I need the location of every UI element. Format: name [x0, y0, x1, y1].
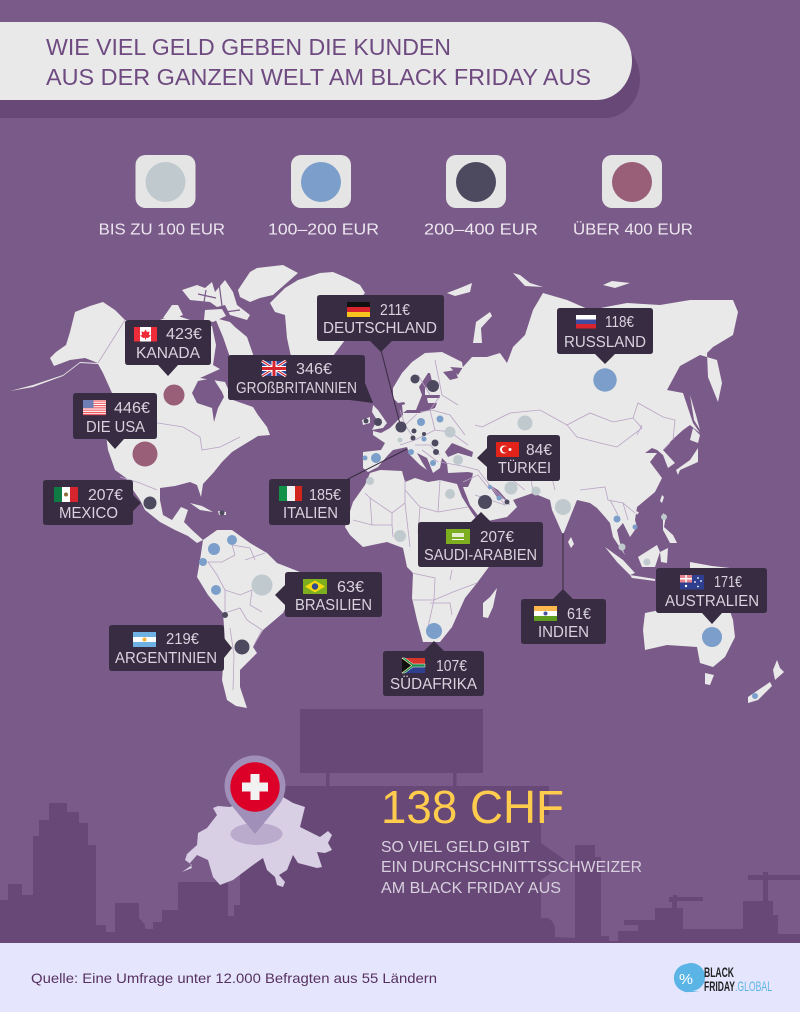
callout: Italien [269, 479, 350, 525]
Arctic islands [163, 265, 298, 363]
callout: Die USA: 446€ [114, 400, 150, 417]
callout: Australien: 171€ [714, 574, 742, 591]
Caribbean islands [190, 503, 226, 515]
callout: Südafrika [383, 641, 484, 696]
Swiss figure description: SO VIEL GELD GIBT [381, 839, 531, 856]
Southeast Asia islands [568, 495, 730, 581]
callout: Brasilien: 63€ [337, 579, 364, 596]
callout: Türkei [477, 435, 560, 481]
callout: Argentinien: 219€ [166, 631, 199, 648]
callout: Indien: INDIEN [538, 624, 589, 641]
callout: Russland [557, 308, 653, 364]
callout: Brasilien: BRASILIEN [295, 597, 372, 614]
New Zealand [748, 660, 784, 703]
callout: Die USA: DIE USA [86, 419, 145, 436]
Tasmania [705, 673, 714, 685]
Swiss figure headline: 138 CHF [381, 781, 564, 833]
callout: Argentinien [109, 625, 232, 671]
callout: Russland: RUSSLAND [564, 334, 646, 351]
callout: Türkei: 84€ [526, 442, 552, 459]
callout: Südafrika: 107€ [436, 658, 467, 675]
callout leader lines [348, 350, 563, 592]
North America [10, 302, 270, 543]
callout: Australien: AUSTRALIEN [665, 593, 759, 610]
flag: Turkey [496, 442, 519, 457]
Swiss flag badge [230, 762, 280, 812]
location pin [224, 755, 286, 834]
legend: up to 100 EUR: BIS ZU 100 EUR [99, 222, 225, 238]
callout: Südafrika: SÜDAFRIKA [390, 675, 477, 693]
pin shadow [230, 823, 282, 845]
callout: Deutschland [317, 295, 444, 352]
Baltic Sea [403, 373, 440, 413]
world map [10, 265, 784, 708]
callout: Großbritannien: GROßBRITANNIEN [236, 380, 357, 397]
callout: Großbritannien: 346€ [296, 361, 332, 378]
flag: Brazil [303, 579, 327, 594]
callout: Mexico [43, 480, 141, 525]
Madagascar [483, 588, 497, 618]
callout: Großbritannien [228, 355, 373, 403]
legend: 200 to 400 EUR: 200–400 EUR [424, 222, 538, 238]
Swiss figure description: AM BLACK FRIDAY AUS [381, 880, 561, 897]
Hudson Bay [192, 378, 224, 422]
flag: Mexico [54, 487, 78, 502]
Africa [345, 470, 510, 642]
logo: Black Friday Global: BLACK [704, 964, 734, 980]
callout: Kanada: KANADA [136, 345, 200, 362]
inland seas [192, 283, 507, 500]
callout: Indien: 61€ [567, 606, 591, 623]
legend: 200 to 400 EUR [424, 155, 538, 238]
callout: Deutschland: 211€ [380, 302, 410, 319]
Northern islands [447, 273, 630, 343]
flag: India [534, 606, 557, 621]
callout: Kanada: 423€ [166, 326, 202, 343]
callout: Australien [656, 568, 767, 624]
callout: Saudi-Arabien: 207€ [480, 529, 514, 546]
Greenland [270, 272, 365, 375]
continents [10, 265, 784, 708]
footer [0, 943, 800, 1012]
flag: United Kingdom [262, 361, 286, 376]
flag: Germany [347, 302, 370, 317]
country borders [98, 320, 675, 690]
flag: Australia [680, 575, 704, 590]
White Sea [443, 370, 458, 380]
logo: Black Friday Global [674, 963, 772, 994]
flag: Russia [576, 315, 596, 328]
flag: Saudi Arabia [446, 529, 470, 544]
South America [197, 530, 300, 708]
legend: 100 to 200 EUR [268, 155, 379, 238]
flag: Argentina [133, 632, 156, 647]
callout: Mexico: MEXICO [59, 505, 118, 522]
British Isles [362, 405, 387, 430]
Black Sea [445, 443, 473, 457]
callout: Deutschland: DEUTSCHLAND [323, 320, 437, 337]
Australia [643, 605, 735, 667]
data bubbles [132, 368, 758, 699]
callout: Mexico: 207€ [88, 487, 123, 504]
callout: Indien [521, 589, 606, 644]
legend: over 400 EUR [573, 155, 693, 238]
callout: Italien: ITALIEN [283, 505, 338, 522]
title text: AUS DER GANZEN WELT AM BLACK FRIDAY AUS [46, 64, 591, 90]
callout: Brasilien [275, 572, 382, 617]
callout: Russland: 118€ [605, 314, 634, 331]
Switzerland map with pin [182, 755, 332, 887]
callout: Italien: 185€ [309, 487, 341, 504]
logo: Black Friday Global: .GLOBAL [735, 978, 772, 994]
flag: Canada [134, 327, 157, 342]
Swiss figure description: EIN DURCHSCHNITTSSCHWEIZER [381, 859, 642, 876]
legend: over 400 EUR: ÜBER 400 EUR [573, 220, 693, 238]
logo: Black Friday Global: FRIDAY [704, 978, 735, 994]
title text: WIE VIEL GELD GEBEN DIE KUNDEN [46, 34, 451, 60]
flag: South Africa [402, 658, 425, 673]
skyline background [0, 709, 800, 943]
callout: Kanada [125, 320, 211, 376]
Arctic channels [198, 283, 240, 312]
title text [46, 34, 591, 90]
map: Switzerland [182, 797, 332, 887]
Eurasia [363, 293, 738, 555]
callout: Die USA [73, 393, 157, 449]
flag: USA [83, 400, 106, 415]
flag: Italy [279, 486, 302, 501]
legend: 100 to 200 EUR: 100–200 EUR [268, 222, 379, 238]
Swiss figure description [381, 839, 642, 897]
callout: Türkei: TÜRKEI [498, 459, 551, 477]
legend: up to 100 EUR [99, 155, 225, 238]
legend [99, 155, 693, 238]
callout: Saudi-Arabien: SAUDI-ARABIEN [424, 547, 537, 564]
Persian Gulf [488, 484, 507, 500]
callout: Saudi-Arabien [418, 512, 543, 567]
source note: Quelle: Eine Umfrage unter 12.000 Befragten aus 55 Ländern [31, 970, 437, 986]
logo: Black Friday Global: % [679, 971, 693, 988]
callout: Argentinien: ARGENTINIEN [115, 650, 217, 667]
Japan and Sakhalin [676, 395, 700, 475]
title banner [0, 22, 640, 118]
